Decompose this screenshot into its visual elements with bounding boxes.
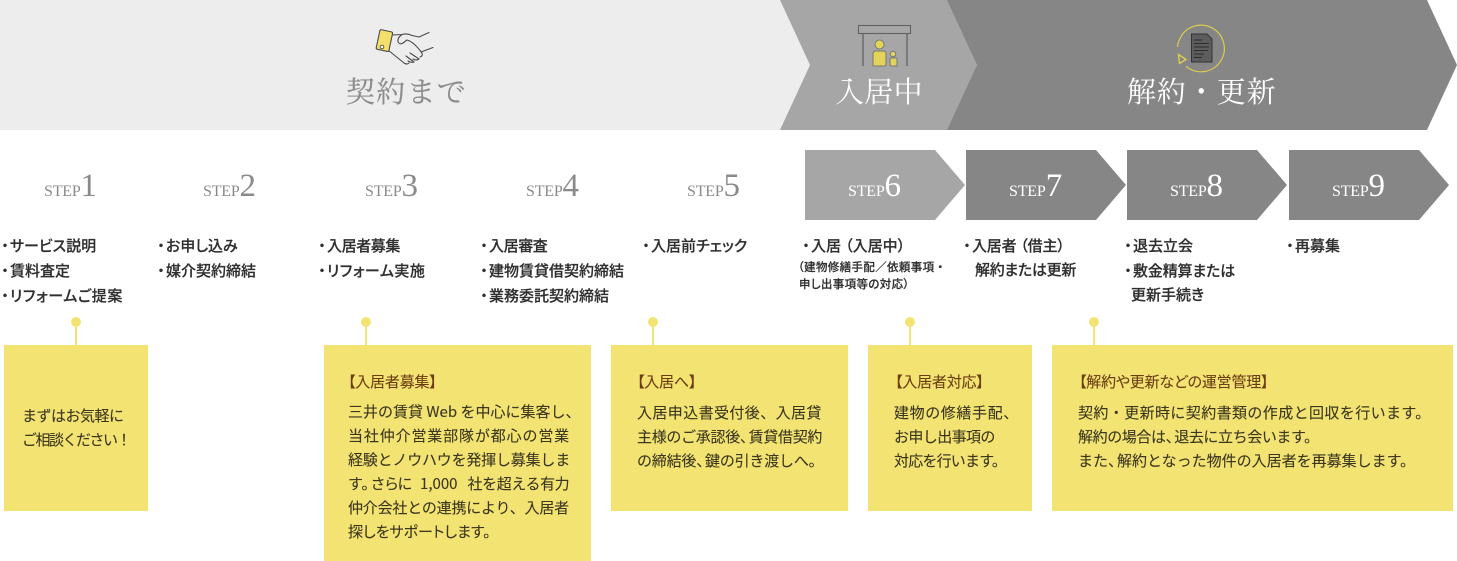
callout body [637,402,823,471]
step 8 list: 敷金精算または [1133,263,1235,280]
step 8 list [1121,238,1235,304]
pin: step 1 [71,317,81,345]
step 6 note: （建物修繕手配／依頼事項・ [798,262,946,274]
callout body: また、解約となった物件の入居者を再募集します。 [1078,450,1415,471]
step 9 list: ・ [1283,238,1297,254]
callout body: 契約・更新時に契約書類の作成と回収を行います。 [1078,402,1431,423]
step 6 note [798,260,946,291]
heading: until contract: 契約まで [346,77,467,109]
callout: consultation [4,345,148,511]
step 2 list: お申し込み [166,238,238,255]
callout text [22,405,130,450]
callout body: 三井の賃貸 Web を中心に集客し、 [348,401,580,422]
callout body: す。さらに 1,000 社を超える有力 [348,473,569,494]
step 4 list: ・ [477,288,491,304]
icon: residents in building [858,25,911,66]
step 2 list [154,238,256,280]
callout body: 仲介会社との連携により、入居者 [348,497,569,518]
step 6 arrow [805,150,965,220]
panel: cancellation and renewal chevron [947,0,1457,130]
callout body: 建物の修繕手配、 [894,402,1019,423]
step 7 list [960,238,1076,279]
pin: step 3 [361,317,371,345]
callout body [348,401,580,542]
step 4 list: ・ [477,238,491,254]
step 4 list: 入居審査 [489,238,547,255]
callout body: 主様のご承認後、賃貸借契約 [637,426,822,447]
callout body: の締結後、鍵の引き渡しへ。 [637,450,823,471]
step 4 list [477,238,624,305]
step 9 arrow [1289,150,1449,220]
step 5 list: 入居前チェック [651,238,747,255]
step 8 list: ・ [1121,238,1135,254]
step 4 list: ・ [477,263,491,279]
pin: step 7 [1089,317,1099,345]
callout body [1078,402,1431,471]
callout: resident support [868,345,1032,511]
step 8 list: ・ [1121,263,1135,279]
step 8 list: 更新手続き [1131,287,1204,304]
step 3 label: STEP3 [365,168,418,204]
callout body: 解約の場合は、退去に立ち会います。 [1078,426,1319,447]
step 6 label: STEP6 [848,168,901,204]
step 7 arrow [966,150,1126,220]
step 3 list: 入居者募集 [327,238,400,255]
step 6 list: 入居 （入居中） [811,238,905,255]
callout heading: 【入居へ】 [637,374,696,391]
step 5 label: STEP5 [687,168,740,204]
step 3 list [315,238,425,280]
step 7 list: 入居者 （借主） [972,238,1065,255]
step 2 label: STEP2 [203,168,256,204]
step 1 list [0,238,123,305]
step 4 list: 建物賃貸借契約締結 [489,263,624,280]
step 1 label: STEP1 [44,168,97,204]
panel: move-in chevron [780,0,977,130]
pin: step 6 [905,317,915,345]
step 6 note: 申し出事項等の対応） [799,279,910,291]
callout body: 対応を行います。 [894,450,1006,471]
heading: move-in: 入居中 [835,77,923,109]
step 2 list: 媒介契約締結 [166,263,256,280]
step 7 label: STEP 7 [1009,168,1062,204]
callout body: 探しをサポートします。 [348,521,491,542]
callout heading: 【入居者募集】 [348,374,437,391]
callout heading: 【入居者対応】 [895,374,984,391]
callout body: 経験とノウハウを発揮し募集しま [348,449,570,470]
pin: step 5 [648,317,658,345]
step 5 list: ・ [639,238,653,254]
step 1 list: サービス説明 [10,238,96,255]
panel: until contract background [0,0,810,130]
step 3 list: リフォーム実施 [327,263,425,280]
step 1 list: 賃料査定 [10,263,70,280]
step 9 label: STEP9 [1332,168,1385,204]
step 7 list: ・ [960,238,974,254]
step 4 list: 業務委託契約締結 [489,288,609,305]
callout body: 入居申込書受付後、入居貸 [637,402,822,423]
callout text: ご相談ください！ [22,429,130,450]
step 2 list: ・ [154,238,168,254]
callout: management [1052,345,1453,511]
step 1 list: リフォームご提案 [10,288,123,305]
step 8 label: STEP8 [1170,168,1223,204]
header band [0,0,1457,130]
icon: document with renewal arrow [1177,24,1225,72]
callout text: まずはお気軽に [22,405,124,426]
step 2 list: ・ [154,263,168,279]
step 3 list: ・ [315,238,329,254]
step 7 list: 解約または更新 [975,262,1076,279]
step 8 list: 退去立会 [1133,238,1193,255]
step 6 list: ・ [799,238,813,254]
step 4 label: STEP4 [526,168,579,204]
step 9 list: 再募集 [1295,238,1340,255]
callout heading: 【解約や更新などの運営管理】 [1079,374,1268,391]
callout body: お申し出事項の [894,426,995,447]
icon: handshake [376,29,434,65]
step 8 arrow [1127,150,1287,220]
heading: cancellation and renewal: 解約・更新 [1127,77,1277,109]
callout body: 当社仲介営業部隊が都心の営業 [348,425,570,446]
step 3 list: ・ [315,263,329,279]
callout: move-in [611,345,848,511]
callout: tenant recruitment [324,345,591,561]
callout body [894,402,1019,471]
